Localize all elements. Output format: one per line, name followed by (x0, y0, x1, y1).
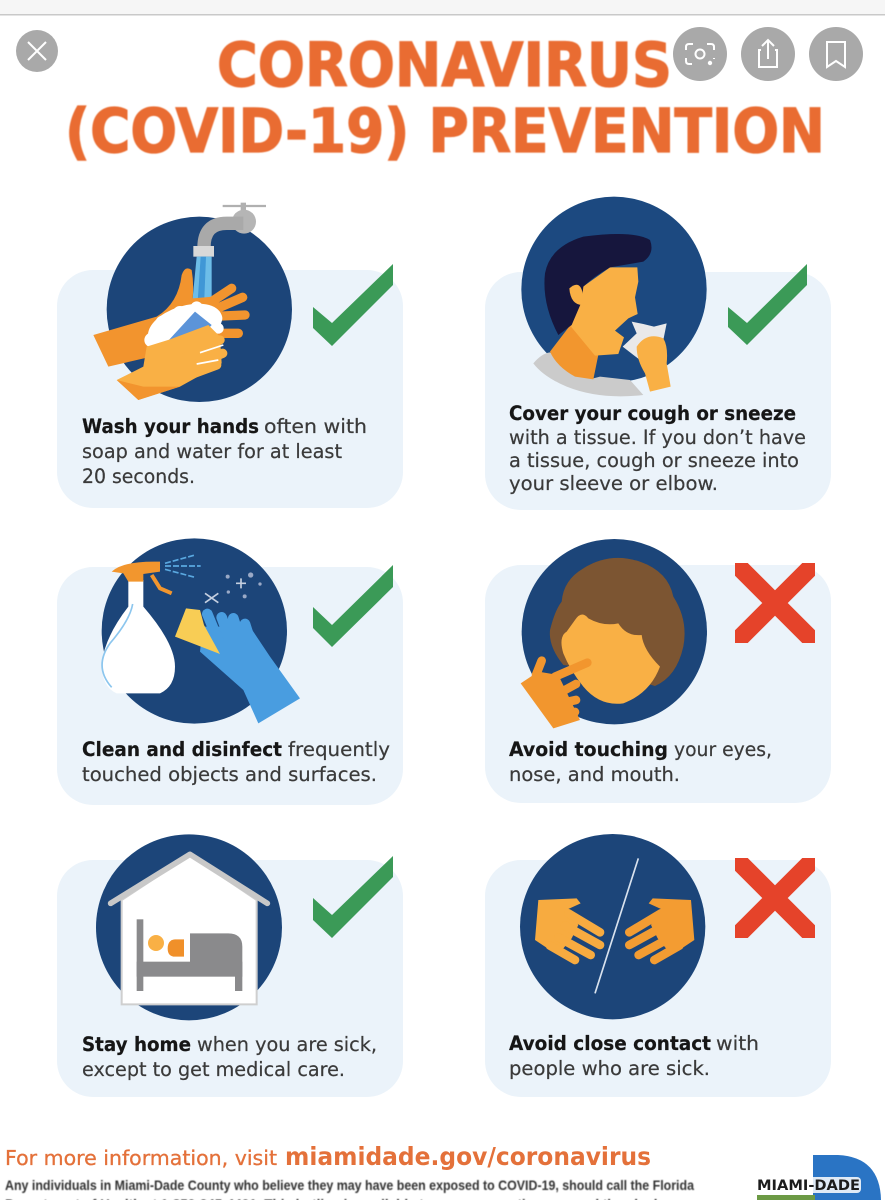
panel: avoid touching (485, 539, 831, 803)
panel: cover cough (485, 197, 831, 510)
icon: two hands separated (520, 834, 705, 1019)
text: avoid touching (509, 738, 772, 786)
text: stay home: Stay home (82, 1033, 191, 1056)
text: cover cough: a tissue, cough or sneeze into (509, 449, 799, 472)
text: cover cough: with a tissue. If you don’t have (509, 426, 806, 449)
text: cover cough (509, 402, 806, 495)
close button (16, 30, 58, 72)
footer: more information link: miamidade.gov/coronavirus (285, 1142, 651, 1171)
footer: more information link: For more information, visit (5, 1146, 277, 1170)
icon: person coughing into tissue (521, 197, 707, 396)
text: clean and disinfect: Clean and disinfect (82, 738, 282, 761)
share button (741, 27, 795, 81)
text: cover cough: your sleeve or elbow. (509, 472, 718, 495)
icon: washing hands (93, 203, 292, 402)
text: clean and disinfect (82, 738, 390, 786)
text: stay home: when you are sick, (197, 1033, 377, 1056)
icon: green check (728, 264, 807, 345)
panel: clean and disinfect (57, 538, 403, 805)
browser top bar (0, 0, 885, 16)
icon: spray bottle and gloved hand (102, 538, 300, 724)
icon: house with bed (96, 834, 282, 1020)
text: avoid touching: your eyes, (674, 738, 772, 761)
logo: Miami-Dade County (757, 1155, 881, 1200)
title: CORONAVIRUS (217, 31, 672, 101)
text: clean and disinfect: touched objects and surfaces. (82, 763, 377, 786)
text: avoid close contact (509, 1032, 759, 1080)
text: wash hands (82, 415, 367, 488)
scan button (673, 27, 727, 81)
panel: wash hands (57, 203, 403, 508)
logo: Miami-Dade County: MIAMI-DADE (757, 1178, 860, 1194)
text: wash hands: soap and water for at least (82, 440, 342, 463)
icon: red cross (735, 563, 815, 643)
text: stay home (82, 1033, 377, 1081)
text: avoid close contact: people who are sick. (509, 1057, 710, 1080)
icon: green check (313, 565, 393, 647)
footer: more information link (5, 1142, 651, 1171)
icon: green check (313, 856, 393, 938)
text: wash hands: Wash your hands (82, 415, 259, 438)
bookmark button (809, 27, 863, 81)
text: wash hands: 20 seconds. (82, 465, 195, 488)
panel: avoid close contact (485, 834, 831, 1097)
text: avoid close contact: with (716, 1032, 759, 1055)
text: wash hands: often with (264, 415, 367, 438)
text: clean and disinfect: frequently (288, 738, 390, 761)
text: cover cough: Cover your cough or sneeze (509, 402, 796, 425)
text: avoid touching: Avoid touching (509, 738, 668, 761)
text: stay home: except to get medical care. (82, 1058, 345, 1081)
panel: stay home (57, 834, 403, 1097)
icon: green check (313, 264, 393, 346)
icon: finger touching face (521, 539, 707, 728)
text: avoid close contact: Avoid close contact (509, 1032, 711, 1055)
footer: disclaimer text (5, 1177, 694, 1200)
footer: disclaimer text: Any individuals in Miami-Dade County who believe they may have been exposed to COVID-19, should call the Florida (5, 1177, 694, 1193)
text: avoid touching: nose, and mouth. (509, 763, 680, 786)
title: (COVID-19) PREVENTION (65, 97, 825, 167)
icon: red cross (735, 858, 815, 938)
title (65, 31, 825, 167)
